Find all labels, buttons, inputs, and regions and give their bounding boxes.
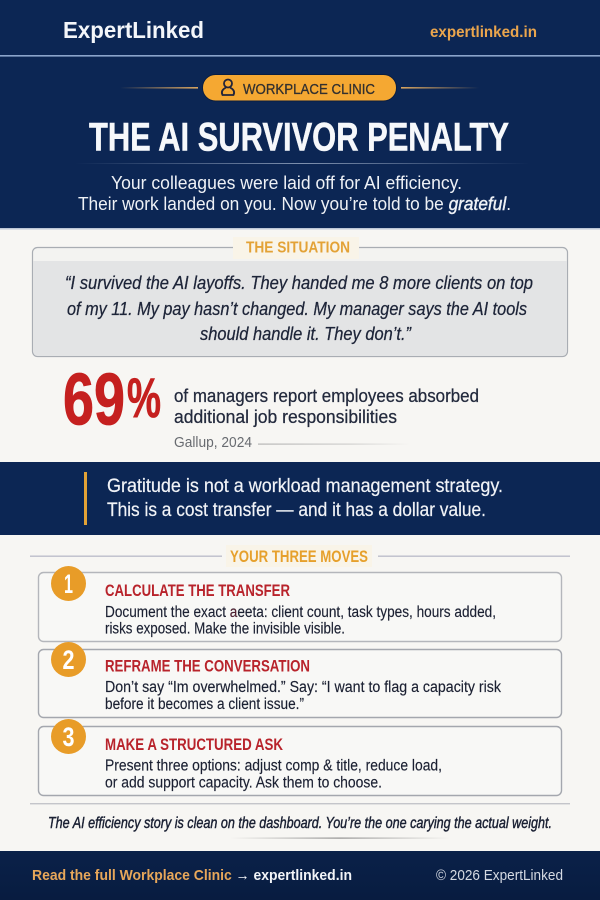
card: move 2: [38, 642, 562, 718]
accent bar: [84, 472, 87, 525]
move 3 body: [105, 758, 442, 792]
heading: your three moves: [30, 545, 570, 567]
callout text: [107, 476, 503, 521]
move 3 body: Present three options: adjust comp & title, reduce load,: [105, 758, 442, 774]
icon: number 1: 1: [64, 569, 73, 599]
move 2 body: [105, 679, 501, 713]
subtitle: [78, 173, 511, 214]
icon: number 2: 2: [62, 645, 74, 675]
badge: workplace clinic: [120, 74, 479, 101]
panel: the situation: [32, 237, 568, 356]
move 2 body: Don’t say “Im overwhelmed.” Say: “I want to flag a capacity risk: [105, 679, 501, 696]
icon: number 2: [51, 642, 86, 677]
stat number: 69: [63, 360, 125, 440]
quote: [65, 273, 533, 344]
stat description: [174, 386, 479, 427]
stat: 69 percent: [63, 360, 479, 451]
quote: of my 11. My pay hasn’t changed. My manager says the AI tools: [67, 299, 527, 319]
callout band: [0, 462, 600, 535]
quote: should handle it. They don’t.”: [200, 324, 412, 344]
footer: [0, 851, 600, 900]
copyright: © 2026 ExpertLinked: [436, 867, 563, 884]
move 2 body: before it becomes a client issue.”: [105, 696, 304, 713]
move 1 body: risks exposed. Make the invisible visible.: [105, 620, 345, 638]
website link: expertlinked.in: [430, 24, 537, 41]
move 3 body: or add support capacity. Ask them to choose.: [105, 774, 382, 792]
quote: “I survived the AI layoffs. They handed me 8 more clients on top: [65, 273, 533, 293]
icon: number 3: 3: [62, 722, 74, 752]
heading: the situation: THE SITUATION: [246, 240, 350, 256]
move 1 body: [105, 604, 496, 638]
move 1 title: CALCULATE THE TRANSFER: [105, 582, 290, 600]
stat number: %: [127, 366, 161, 429]
subtitle: Your colleagues were laid off for AI efficiency.: [111, 173, 462, 193]
badge: workplace clinic: WORKPLACE CLINIC: [243, 81, 375, 98]
header banner: [0, 0, 600, 230]
stat description: additional job responsibilities: [174, 407, 397, 427]
heading: your three moves: YOUR THREE MOVES: [230, 548, 368, 566]
stat description: of managers report employees absorbed: [174, 386, 479, 406]
callout text: This is a cost transfer — and it has a dollar value.: [107, 500, 486, 521]
icon: person: [222, 80, 234, 95]
icon: number 3: [51, 719, 86, 754]
move 1 body: Document the exact aeeta: client count, task types, hours added,: [105, 604, 496, 621]
icon: number 1: [51, 566, 86, 601]
card: move 1: [38, 566, 562, 642]
card: move 3: [38, 719, 562, 796]
callout text: Gratitude is not a workload management strategy.: [107, 476, 503, 497]
footer link: Read the full Workplace Clinic → expertlinked.in: [32, 867, 352, 884]
move 3 title: MAKE A STRUCTURED ASK: [105, 736, 283, 754]
source: Gallup, 2024: [174, 435, 252, 451]
move 2 title: REFRAME THE CONVERSATION: [105, 658, 310, 676]
brand logo: ExpertLinked: [63, 17, 204, 43]
subtitle: Their work landed on you. Now you’re told to be grateful.: [78, 194, 511, 214]
